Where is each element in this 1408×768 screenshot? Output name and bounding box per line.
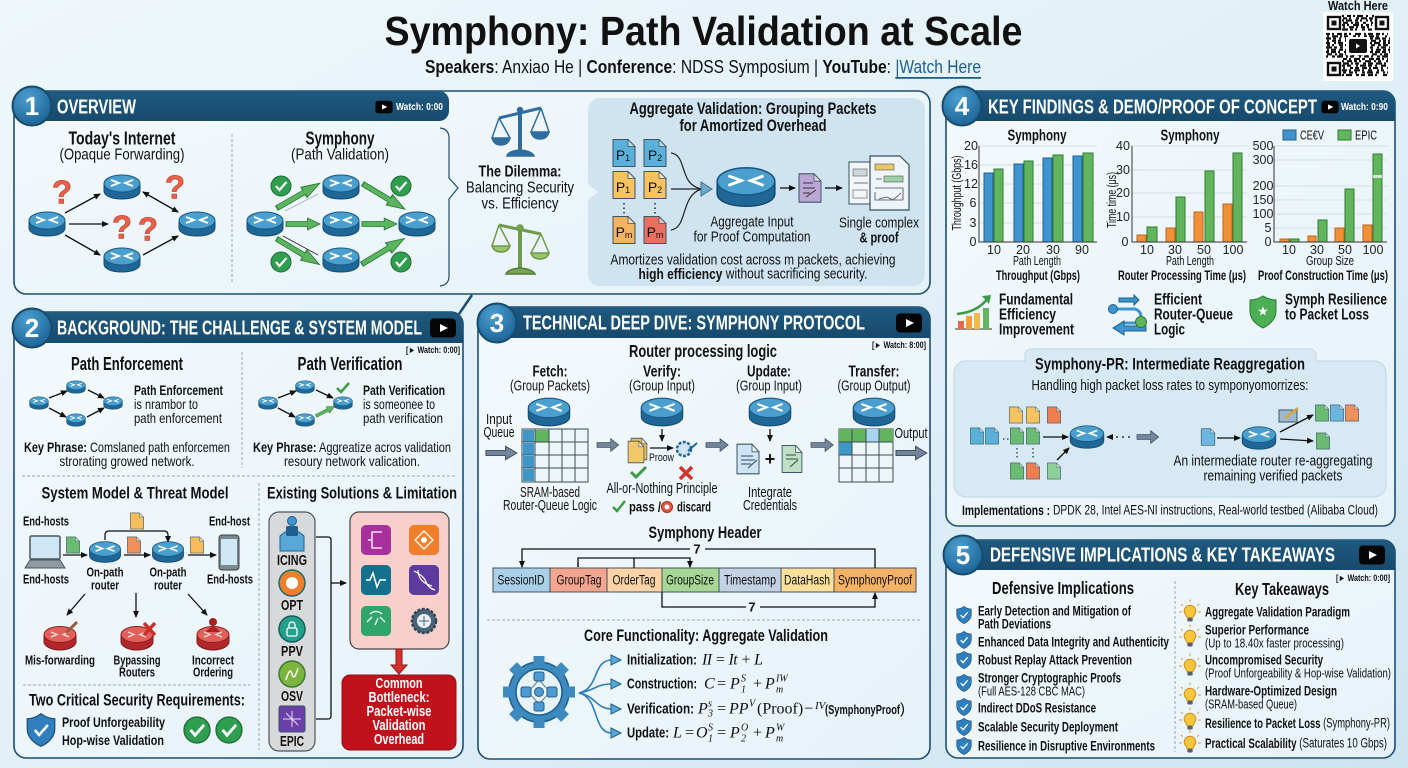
today's internet diagram: Today's Internet <box>68 128 176 148</box>
system and threat model: System Model & Threat Model <box>42 484 228 502</box>
formula: construction: IW <box>775 674 789 684</box>
finding: router-queue logic: Efficient <box>1154 292 1203 308</box>
formula: construction: P <box>729 676 740 692</box>
header bar: technical deep dive: 3 <box>490 308 504 338</box>
step: verify: (Group Input) <box>629 378 695 394</box>
bar chart: proof construction time: 300 <box>1253 153 1273 167</box>
finding: resilience to packet loss <box>1250 292 1387 328</box>
threat: mis-forwarding: Mis-forwarding <box>25 652 95 668</box>
queue grid <box>522 429 588 482</box>
panel: aggregate validation: for Amortized Overhead <box>680 117 826 135</box>
core functionality <box>503 627 905 744</box>
formula: update: Update: <box>627 724 669 742</box>
bar chart: router processing time: Path Length <box>1166 254 1214 268</box>
system and threat model: End-hosts <box>23 572 69 586</box>
bar chart: router processing time: 50 <box>1197 243 1211 257</box>
formula: update: S <box>708 722 713 734</box>
packet documents: P <box>616 224 625 240</box>
existing solutions: PPV <box>281 644 303 660</box>
bar chart: proof construction time: 50 <box>1338 243 1352 257</box>
panel 2: background <box>12 308 463 758</box>
formula: verification: 3 <box>707 708 713 720</box>
bar chart: router processing time: Time time (μs) <box>1105 172 1119 228</box>
finding: efficiency improvement: Fundamental <box>999 292 1073 308</box>
symphony header diagram: DataHash <box>784 572 830 588</box>
callout: common bottleneck: Packet-wise <box>366 704 432 720</box>
step: fetch: SRAM-based <box>520 485 580 501</box>
list: defensive implications: Defensive Implications <box>992 578 1134 598</box>
icon: laptop <box>25 536 65 568</box>
bar chart: router processing time: 30 <box>1168 243 1182 257</box>
step: update: Integrate <box>748 485 792 501</box>
system and threat model: router <box>154 578 182 592</box>
formula: update: m <box>776 734 783 744</box>
header bar: overview <box>12 86 449 126</box>
packet documents <box>613 140 666 244</box>
step: fetch: Input <box>486 412 512 428</box>
panel: aggregate validation: high efficiency without sacrificing security. <box>638 266 868 282</box>
symphony header diagram: OrderTag <box>612 572 656 588</box>
list: defensive implications: Robust Replay Attack Prevention <box>978 652 1132 668</box>
step: verify: discard <box>677 500 711 514</box>
step: update: Credentials <box>743 498 797 514</box>
bar chart: proof construction time: 10 <box>1282 243 1296 257</box>
header bar: technical deep dive <box>478 304 930 342</box>
bar chart: throughput: 6 <box>970 196 977 210</box>
step: update <box>736 364 802 514</box>
list: key takeaways: (SRAM-based Queue) <box>1205 696 1297 712</box>
symphony diagram: Symphony <box>306 128 375 148</box>
formula: initialization: II = It + L <box>701 652 763 668</box>
header bar: defensive implications <box>944 536 1395 574</box>
router with aggregation arrows <box>1043 426 1159 460</box>
bar chart: router processing time <box>1105 128 1247 283</box>
panel: aggregate validation: Amortizes validation cost across m packets, achieving <box>610 252 896 268</box>
list: key takeaways: Superior Performance <box>1205 622 1309 638</box>
step: verify <box>606 364 718 514</box>
step: fetch: (Group Packets) <box>510 378 590 394</box>
step: update: + <box>765 449 775 469</box>
subtitle: speakers and conference: Speakers: Anxiao He | Conference: NDSS Symposium | YouTube: |Watch Here <box>425 57 981 77</box>
formula: construction <box>627 674 789 696</box>
today's internet diagram: (Opaque Forwarding) <box>60 146 184 164</box>
packet documents: P <box>648 179 657 195</box>
formula: construction: S <box>741 674 746 684</box>
finding: router-queue logic: Router-Queue <box>1154 306 1233 324</box>
formula: construction: 1 <box>741 684 746 696</box>
packet documents: P <box>616 147 625 163</box>
bar chart: throughput: Symphony <box>1008 128 1067 144</box>
formula: update: W <box>776 722 786 734</box>
threat: incorrect ordering: Incorrect <box>192 652 234 668</box>
arrows to formulas <box>579 660 612 733</box>
bar chart: throughput: 20 <box>1016 243 1030 257</box>
formula: verification: (Proof) <box>757 700 803 718</box>
symphony header diagram: SessionID <box>498 572 545 588</box>
formula: update: O <box>696 724 708 742</box>
header bar: background <box>12 308 463 348</box>
formula: construction: Construction: <box>627 676 697 692</box>
icon: PPV <box>279 616 305 642</box>
list: key takeaways: (Up to 18.40x faster processing) <box>1205 636 1344 650</box>
packet documents: 2 <box>657 153 662 163</box>
title: Symphony: Path Validation at Scale <box>384 8 1022 54</box>
callout: common bottleneck <box>342 675 456 750</box>
threat: incorrect ordering: Ordering <box>193 664 233 680</box>
formula: construction: m <box>776 684 783 696</box>
panel: symphony-pr: remaining verified packets <box>1204 468 1342 484</box>
panel 1: overview <box>12 86 930 294</box>
callout: common bottleneck: Validation <box>372 718 426 734</box>
step: transfer: Output <box>894 426 928 442</box>
icon: OSV <box>279 661 305 687</box>
core functionality: Core Functionality: Aggregate Validation <box>584 627 828 645</box>
symphony header diagram: Timestamp <box>724 572 776 588</box>
formula: verification: IV <box>814 700 827 712</box>
bar chart: proof construction time <box>1253 128 1388 283</box>
bar chart: proof construction time: 200 <box>1253 179 1273 193</box>
bar chart: proof construction time: CE€V <box>1300 128 1324 142</box>
today's internet diagram: ? <box>165 168 185 206</box>
formula: construction: P <box>764 676 775 692</box>
bar chart: throughput: Path Length <box>1013 254 1061 268</box>
bar chart: throughput: 90 <box>1075 243 1089 257</box>
bar chart: proof construction time: 100 <box>1253 207 1273 221</box>
list: key takeaways: Uncompromised Security <box>1205 652 1323 668</box>
formula: verification: ) <box>900 700 905 718</box>
panel 3: technical deep dive: [► Watch: 8:00] <box>872 340 926 350</box>
panel: aggregate validation: for Proof Computation <box>694 228 810 246</box>
header bar: key findings: Watch: 0:90 <box>1341 101 1388 113</box>
formula: update: + <box>752 724 763 742</box>
bar chart: throughput: Throughput (Gbps) <box>950 156 964 230</box>
bar chart: throughput: 3 <box>970 216 977 230</box>
header bar: defensive implications: 5 <box>956 540 970 570</box>
panel: aggregate validation: & proof <box>860 230 899 246</box>
callout: common bottleneck: Common <box>376 676 422 692</box>
formula: verification: PP <box>728 700 749 718</box>
symphony header diagram: GroupSize <box>666 572 714 588</box>
packet documents: P <box>647 224 656 240</box>
formula: construction: + <box>752 676 763 692</box>
formula: update: 2 <box>741 734 746 744</box>
existing solutions: EPIC <box>280 734 304 750</box>
formula: verification: (SymphonyProof <box>825 703 901 717</box>
bar chart: router processing time: Router Processing Time (μs) <box>1118 267 1246 283</box>
existing solutions: OPT <box>281 598 303 614</box>
bar chart: proof construction time: EPIC <box>1355 128 1377 142</box>
today's internet diagram: ? <box>112 208 132 246</box>
connector between panels 1 and 2 <box>459 295 472 314</box>
bar chart: proof construction time: 30 <box>1310 243 1324 257</box>
bar chart: router processing time: 20 <box>1116 186 1130 200</box>
bar chart: throughput: 12 <box>964 177 978 191</box>
panel 2: background: [► Watch: 0:00] <box>406 345 460 355</box>
path verification: resoury network valication. <box>284 453 420 469</box>
bar chart: router processing time: 30 <box>1116 163 1130 177</box>
panel: symphony-pr: Symphony-PR: Intermediate Reaggregation <box>1035 354 1305 374</box>
path verification: is someonee to <box>363 396 435 412</box>
re-aggregation output <box>1201 405 1359 449</box>
bar chart: router processing time: 10 <box>1140 243 1154 257</box>
icon: ICING <box>280 516 304 551</box>
bar chart: throughput: 16 <box>964 158 978 172</box>
system and threat model: End-host <box>209 514 250 528</box>
bar chart: throughput: 20 <box>964 139 978 153</box>
bar chart: proof construction time: 5 <box>1265 221 1272 235</box>
bar chart: router processing time: Symphony <box>1160 128 1220 144</box>
packet documents: P <box>648 147 657 163</box>
bar chart: proof construction time: 150 <box>1253 193 1273 207</box>
dilemma text: The Dilemma: <box>478 164 562 180</box>
system and threat model: router <box>91 578 119 592</box>
formula: update: O <box>741 722 748 734</box>
formula: construction: = <box>716 676 727 692</box>
today's internet diagram: ? <box>52 174 72 210</box>
packet documents: m <box>625 230 632 240</box>
formula: update: P <box>729 724 740 742</box>
aggregation arrows and router <box>671 153 842 230</box>
threat: mis-forwarding <box>25 622 95 668</box>
formula: construction: C <box>704 676 715 692</box>
security requirements: Hop-wise Validation <box>62 732 164 748</box>
icon: efficiency scale <box>492 225 549 274</box>
callout: common bottleneck: Bottleneck: <box>368 690 430 706</box>
finding: resilience to packet loss: to Packet Loss <box>1285 306 1369 324</box>
list: defensive implications: Indirect DDoS Resistance <box>978 700 1096 716</box>
icon: OPT <box>279 570 305 596</box>
symphony header diagram: GroupTag <box>556 572 602 588</box>
formula: verification: Verification: <box>627 700 694 718</box>
formula: verification: s <box>708 698 712 710</box>
bar chart: router processing time: 0 <box>1122 235 1129 249</box>
formula: update <box>627 722 786 744</box>
finding: router-queue logic: Logic <box>1154 322 1185 338</box>
bar chart: throughput: 30 <box>1046 243 1060 257</box>
packet documents: 2 <box>657 185 662 195</box>
list: defensive implications <box>957 578 1169 755</box>
security requirements: Proof Unforgeability <box>62 714 165 730</box>
formula: update: L <box>672 724 682 742</box>
bar chart: proof construction time: 0 <box>1265 235 1272 249</box>
system and threat model: End-hosts <box>207 572 253 586</box>
panel 4: key findings <box>942 86 1395 526</box>
path verification: Path Verification <box>298 354 402 374</box>
path verification: path verification <box>363 410 443 426</box>
threat: bypassing routers: Routers <box>119 664 155 680</box>
bar chart: router processing time: 10 <box>1116 210 1130 224</box>
today's internet diagram: ? <box>138 210 158 248</box>
list: defensive implications: Early Detection and Mitigation of <box>978 604 1131 618</box>
step: transfer <box>838 364 928 482</box>
QR code block <box>1323 0 1393 81</box>
panel 3: technical deep dive <box>478 304 930 759</box>
formula: update: = <box>716 724 727 742</box>
path enforcement: Path Enforcement <box>71 354 183 374</box>
list: defensive implications: Resilience in Disruptive Environments <box>978 738 1155 754</box>
system and threat model: End-hosts <box>23 514 69 528</box>
list: defensive implications: Enhanced Data Integrity and Authenticity <box>978 634 1169 650</box>
bar chart: proof construction time: 500 <box>1253 139 1273 153</box>
formula: initialization: Initialization: <box>627 652 697 668</box>
security requirements <box>27 690 245 748</box>
path verification <box>253 354 451 469</box>
step: fetch: Queue <box>484 425 514 441</box>
symphony header diagram: Symphony Header <box>648 524 762 542</box>
icon: security scale <box>492 108 549 156</box>
panel: symphony-pr <box>954 349 1386 497</box>
panel 5: defensive implications: [► Watch: 0:00] <box>1336 573 1390 583</box>
formula: verification <box>627 698 905 720</box>
panel: aggregate validation: Aggregate Input <box>710 214 794 230</box>
step: verify: pass / <box>629 500 661 514</box>
packet documents: 1 <box>625 153 630 163</box>
finding: router-queue logic <box>1108 292 1233 338</box>
header bar: key findings: 4 <box>955 91 970 121</box>
bar chart: router processing time: 40 <box>1116 139 1130 153</box>
symphony header diagram <box>493 524 916 614</box>
path enforcement: Path Enforcement <box>134 382 223 398</box>
header bar: overview: OVERVIEW <box>57 96 136 118</box>
path enforcement: path enforcement <box>134 410 222 426</box>
existing solutions: OSV <box>281 689 303 705</box>
list: key takeaways: Aggregate Validation Paradigm <box>1205 604 1350 620</box>
callout: common bottleneck: Overhead <box>374 732 424 748</box>
list: defensive implications: Scalable Security Deployment <box>978 720 1118 734</box>
formula: initialization <box>627 652 763 668</box>
formula: verification: = <box>716 700 727 718</box>
dilemma text: vs. Efficiency <box>482 196 558 212</box>
list: key takeaways: Hardware-Optimized Design <box>1205 684 1337 698</box>
finding: efficiency improvement <box>955 292 1075 338</box>
step: fetch: Fetch: <box>532 364 568 380</box>
list: defensive implications: (Full AES-128 CBC MAC) <box>978 684 1085 698</box>
symphony diagram: (Path Validation) <box>291 146 389 164</box>
threat: incorrect ordering <box>192 618 234 680</box>
finding: efficiency improvement: Efficiency <box>999 306 1056 324</box>
list: defensive implications: Stronger Cryptographic Proofs <box>978 670 1121 686</box>
existing solutions <box>267 484 457 751</box>
path verification: Path Verification <box>363 382 445 398</box>
header bar: technical deep dive: TECHNICAL DEEP DIVE: SYMPHONY PROTOCOL <box>523 312 865 334</box>
path enforcement <box>24 354 230 469</box>
icon: tablet <box>219 535 239 570</box>
symphony header diagram: 7 <box>693 542 701 556</box>
panel 5: defensive implications <box>944 536 1395 758</box>
bar chart: throughput: Throughput (Gbps) <box>996 267 1080 283</box>
panel: aggregate validation: Single complex <box>839 214 919 232</box>
input packets <box>970 407 1061 479</box>
finding: resilience to packet loss: ★ <box>1257 304 1269 318</box>
security requirements: Two Critical Security Requirements: <box>29 690 245 710</box>
bar chart: proof construction time: 100 <box>1363 243 1383 257</box>
system and threat model <box>23 484 253 685</box>
dilemma text <box>466 164 574 212</box>
step: verify: All-or-Nothing Principle <box>606 481 718 497</box>
panel 3: technical deep dive: Router processing logic <box>629 341 777 361</box>
step: fetch: Router-Queue Logic <box>503 498 597 514</box>
packet documents: P <box>616 179 625 195</box>
formula: update: = <box>684 724 695 742</box>
path enforcement: strorating growed network. <box>60 453 194 469</box>
formula: verification: − <box>804 700 813 718</box>
path enforcement: Key Phrase: Comslaned path enforcemen <box>24 439 230 455</box>
formula: verification: P <box>697 700 708 718</box>
red arrow <box>391 649 407 674</box>
system and threat model: On-path <box>150 564 187 580</box>
symphony header diagram: 7 <box>748 600 756 614</box>
formula: update: P <box>764 724 775 742</box>
formula: verification: V <box>749 698 757 710</box>
icon: EPIC <box>279 706 305 732</box>
packet documents: m <box>656 230 663 240</box>
bar chart: throughput <box>950 128 1097 283</box>
header bar: overview: 1 <box>25 91 39 121</box>
packet documents: 1 <box>625 185 630 195</box>
bar chart: router processing time: 100 <box>1223 243 1243 257</box>
today's internet diagram <box>29 128 215 272</box>
step: fetch <box>484 364 597 514</box>
path enforcement: is nrambor to <box>134 396 198 412</box>
panel: limitation icons <box>350 512 449 649</box>
bar chart: proof construction time: Group Size <box>1306 254 1354 268</box>
path verification: Key Phrase: Aggreatize acros validation <box>253 439 451 455</box>
system and threat model: On-path <box>86 564 124 580</box>
finding: efficiency improvement: Improvement <box>999 322 1075 338</box>
header bar: background: BACKGROUND: THE CHALLENGE & SYSTEM MODEL <box>57 316 422 340</box>
step: verify: Proow <box>649 452 674 464</box>
panel: symphony-pr: Handling high packet loss rates to symponyomorrizes: <box>1032 378 1308 394</box>
step: update: Update: <box>747 364 791 380</box>
threat: bypassing routers <box>114 623 161 680</box>
step: transfer: (Group Output) <box>838 378 910 394</box>
threat: bypassing routers: Bypassing <box>114 652 161 668</box>
symphony diagram <box>247 128 435 272</box>
list: defensive implications: Path Deviations <box>978 616 1051 632</box>
list: key takeaways: Key Takeaways <box>1235 579 1329 599</box>
existing solutions: ICING <box>277 553 307 569</box>
step: update: (Group Input) <box>736 378 802 394</box>
panel: aggregate validation <box>588 98 925 286</box>
formula: update: 1 <box>708 734 713 744</box>
proof document icon <box>849 156 909 210</box>
existing solutions: Existing Solutions & Limitation <box>267 484 457 502</box>
icon: gear <box>503 656 575 728</box>
header bar: background: 2 <box>25 313 39 343</box>
bar chart: throughput: 10 <box>987 243 1001 257</box>
panel: aggregate validation: Aggregate Validation: Grouping Packets <box>630 100 876 118</box>
dilemma text: Balancing Security <box>466 180 574 196</box>
symphony header diagram: SymphonyProof <box>838 572 912 588</box>
list: key takeaways <box>1179 579 1391 752</box>
bar chart: throughput: 0 <box>970 235 977 249</box>
step: transfer: Transfer: <box>848 364 900 380</box>
header bar: overview: Watch: 0:00 <box>396 101 443 113</box>
step: verify: Verify: <box>643 364 681 380</box>
header bar: key findings <box>942 86 1395 126</box>
